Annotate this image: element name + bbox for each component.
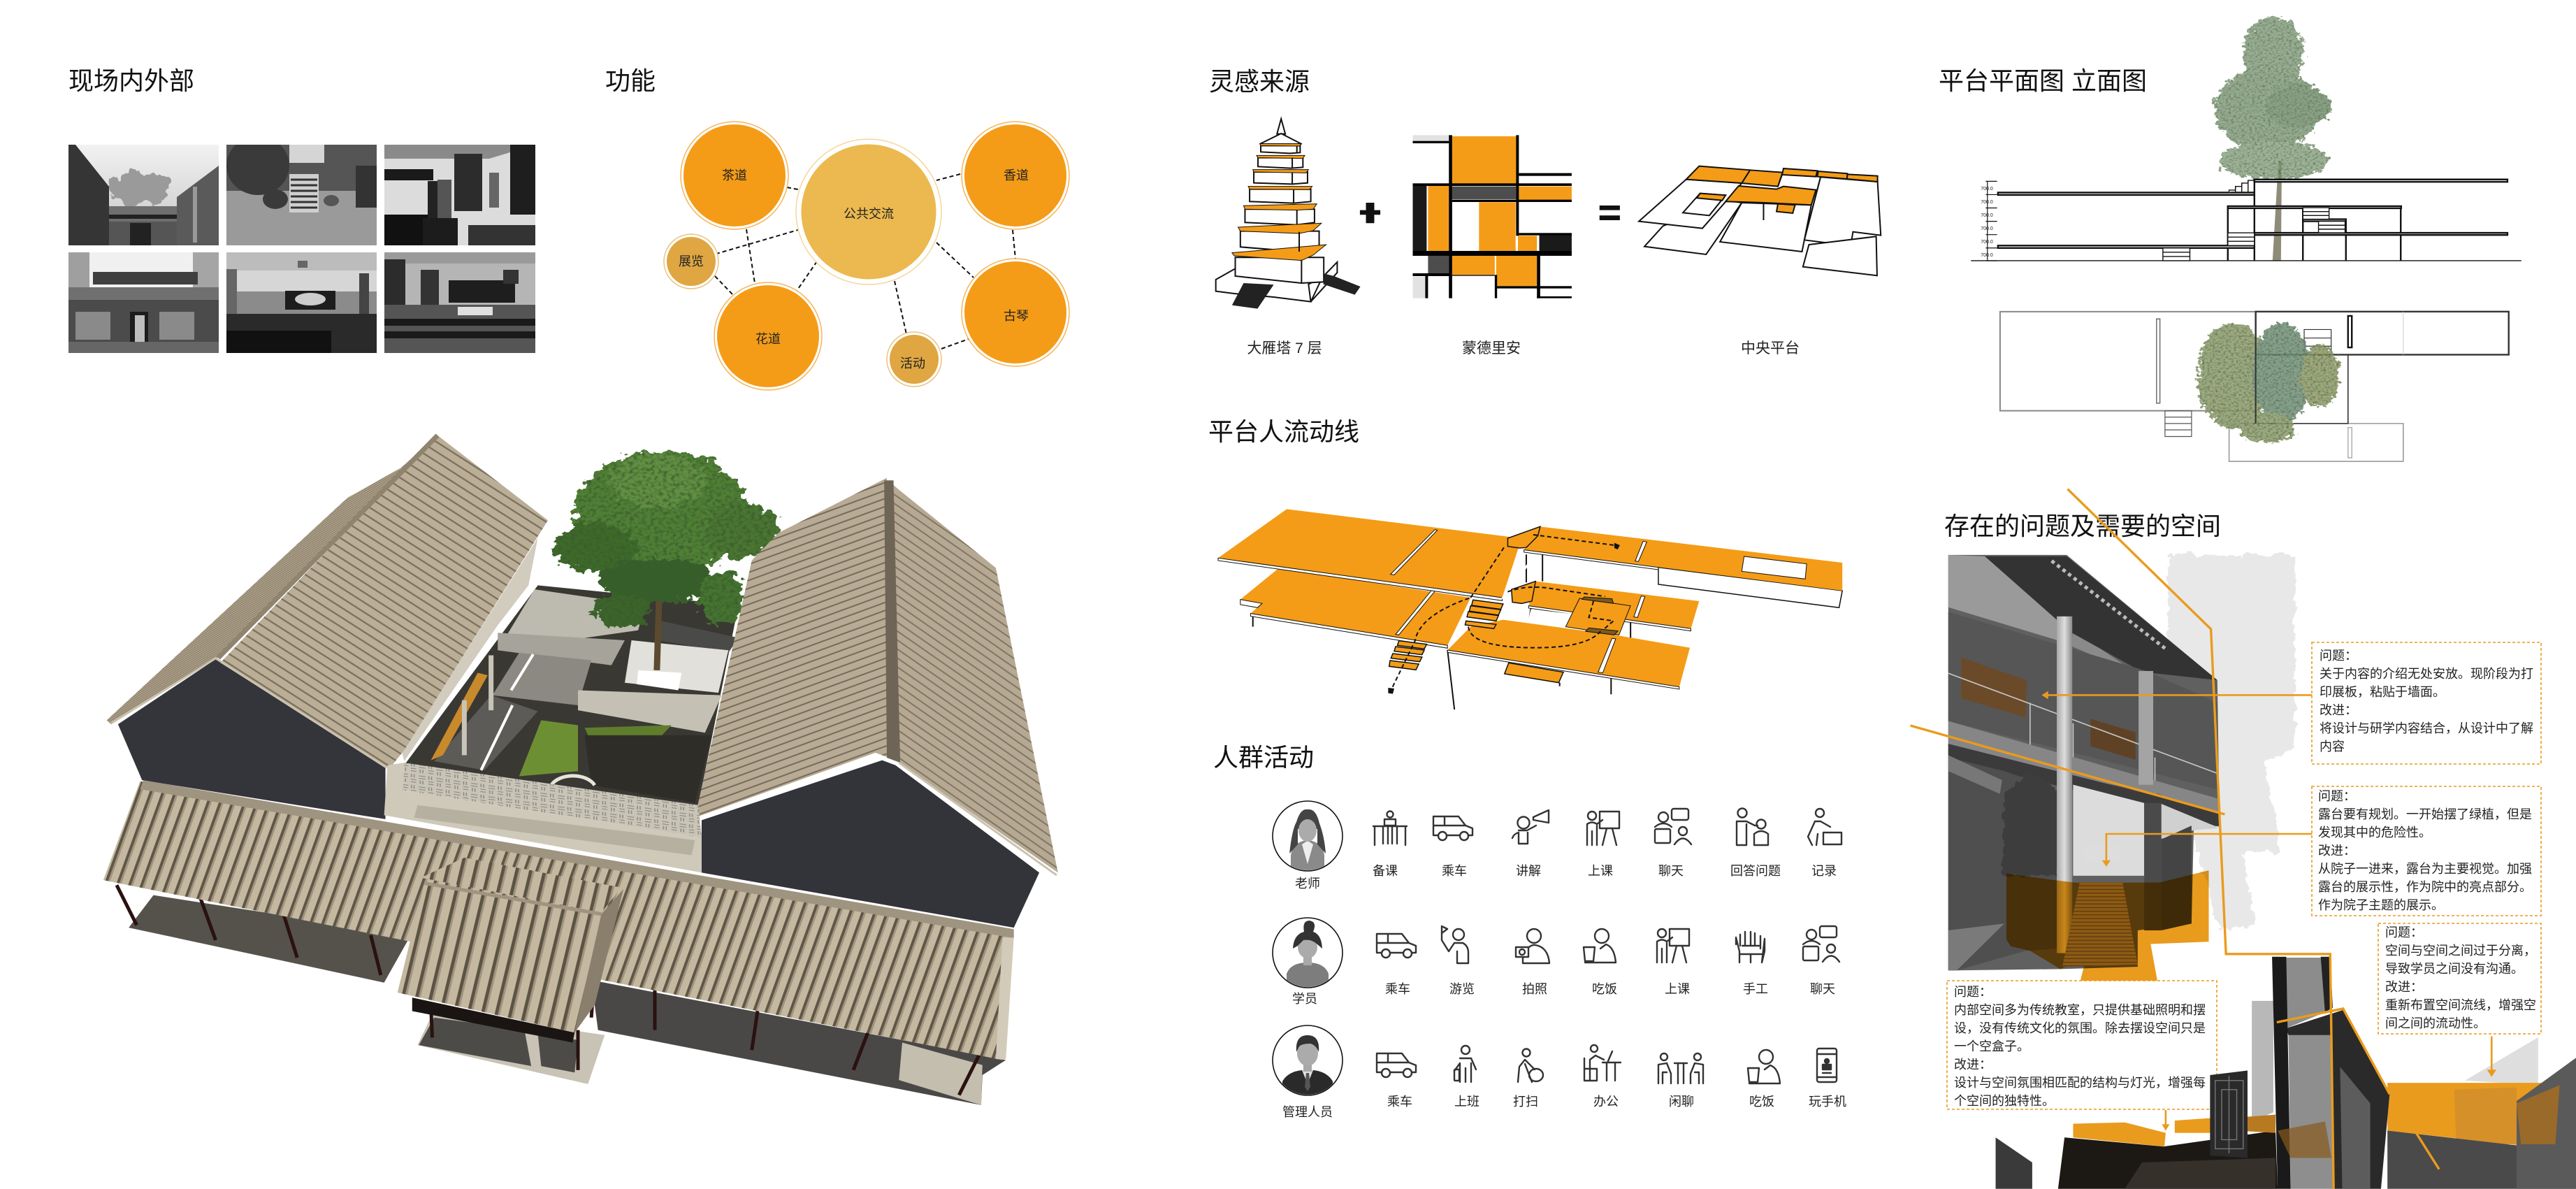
activity labels: 手工 (1743, 982, 1768, 996)
callout: classroom atmosphere issue: 内部空间多为传统教室，只提供基础照明和摆 (1954, 1003, 2206, 1017)
bubble: public exchange (796, 139, 941, 284)
courtyard with platforms (404, 585, 739, 805)
elevation dimensions: 700.0 (1981, 240, 1993, 245)
activity labels: 备课 (1373, 864, 1398, 878)
activity labels: 乘车 (1442, 864, 1467, 878)
callout: terrace issue: 改进： (2318, 844, 2356, 858)
callout: separated spaces issue: 间之间的流动性。 (2385, 1016, 2486, 1030)
dashed circulation path (1389, 535, 1614, 693)
activity labels: 吃饭 (1749, 1095, 1774, 1109)
callout: classroom atmosphere issue: 问题： (1954, 985, 1992, 999)
callout: separated spaces issue: 重新布置空间流线，增强空 (2385, 998, 2536, 1012)
small lower plate (1505, 663, 1563, 683)
tree trunk (657, 585, 660, 670)
callout: display issue: 关于内容的介绍无处安放。现阶段为打 (2320, 667, 2533, 681)
activity labels: 游览 (1449, 982, 1475, 996)
icon row: teacher (1373, 808, 1841, 845)
avatar labels (1282, 877, 1333, 1119)
plus sign (1360, 203, 1380, 223)
lower-right plate (1527, 582, 1699, 631)
equals sign (1600, 206, 1620, 220)
orange highlight over stair (2006, 870, 2209, 984)
upper-right plate (1524, 526, 1842, 591)
stairs (1389, 526, 1540, 670)
upper-left plate (1218, 509, 1535, 600)
elevation dimensions: 700.0 (1981, 253, 1993, 258)
arrow and start marker (1388, 543, 1620, 694)
plan lines (2000, 312, 2509, 461)
activity labels: 上课 (1665, 982, 1690, 996)
activity labels: 乘车 (1385, 982, 1410, 996)
title: inspiration: 灵感来源 (1209, 67, 1310, 96)
stair hall photo (1948, 555, 2220, 970)
orange construction lines (1911, 489, 2439, 1189)
orange table highlights (2073, 1118, 2213, 1146)
lower-left plate (1240, 568, 1470, 648)
photo: classroom wall with sign (384, 145, 535, 245)
callout: classroom atmosphere issue: 一个空盒子。 (1954, 1039, 2029, 1053)
elevation dimensions: 700.0 (1981, 213, 1993, 218)
activity labels: 聊天 (1658, 864, 1684, 878)
bubble: exhibition (664, 234, 718, 289)
central stair (2062, 883, 2138, 967)
activity labels: 玩手机 (1809, 1095, 1846, 1109)
right building gable and roof (695, 478, 1058, 928)
bubble: incense: 香道 (1004, 168, 1029, 182)
callout: display issue (2312, 642, 2541, 764)
callout: classroom atmosphere issue: 个空间的独特性。 (1954, 1094, 2055, 1108)
elevation tree (2214, 17, 2331, 261)
columns (117, 885, 979, 1095)
callout: display issue: 印展板，粘贴于墙面。 (2320, 685, 2445, 699)
function bubble diagram (664, 122, 1069, 390)
bubble: tea (681, 122, 788, 229)
bubble: activity (887, 332, 941, 387)
bubble: exhibition: 展览 (679, 254, 704, 268)
callout: separated spaces issue: 导致学员之间没有沟通。 (2385, 962, 2524, 976)
callout: classroom atmosphere issue: 设，没有传统文化的氛围。除去摆设空间只是 (1954, 1021, 2206, 1035)
activity matrix (1273, 801, 1846, 1119)
pagoda icon (1216, 119, 1361, 309)
central platform sketch (1639, 166, 1881, 275)
callout: terrace issue (2312, 786, 2541, 916)
avatar labels: 老师 (1295, 877, 1320, 891)
activity labels (1373, 864, 1846, 1109)
bubble: public exchange: 公共交流 (844, 207, 894, 221)
photo: classroom with tables (384, 252, 535, 353)
bubble: incense (962, 122, 1069, 229)
inspiration diagram (1216, 119, 1881, 309)
title: functions: 功能 (605, 66, 656, 95)
avatar labels: 管理人员 (1282, 1105, 1333, 1119)
platform circulation axonometric (1218, 509, 1842, 709)
lower white volume (1658, 568, 1842, 607)
activity labels: 讲解 (1516, 864, 1541, 878)
title: problems and needed spaces: 存在的问题及需要的空间 (1944, 512, 2221, 540)
callout: terrace issue: 发现其中的危险性。 (2318, 826, 2431, 839)
arrow heads (2041, 691, 2496, 1130)
activity labels: 上课 (1588, 864, 1613, 878)
lattice screen (2210, 1071, 2248, 1158)
title: site photos: 现场内外部 (68, 66, 194, 95)
long front corrugated roof (103, 780, 1014, 1060)
callout: terrace issue: 露台的展示性，作为院中的亮点部分。 (2318, 880, 2532, 894)
callout: display issue: 将设计与研学内容结合，从设计中了解 (2320, 721, 2533, 735)
elevation dimensions: 700.0 (1981, 226, 1993, 231)
support columns (1253, 554, 1630, 709)
callout: separated spaces issue: 空间与空间之间过于分离， (2385, 944, 2536, 958)
callout: display issue: 问题： (2320, 649, 2357, 663)
avatar: staff (1273, 1025, 1343, 1095)
callout: display issue: 内容 (2320, 740, 2345, 754)
callout: terrace issue: 从院子一进来，露台为主要视觉。加强 (2318, 862, 2532, 876)
avatar labels: 学员 (1292, 992, 1317, 1006)
activity labels: 上班 (1454, 1095, 1479, 1109)
activity labels: 回答问题 (1730, 864, 1781, 878)
activity labels: 聊天 (1810, 982, 1835, 996)
photo: stairs in courtyard (226, 145, 377, 245)
problem collage (1948, 555, 2576, 1189)
activity labels: 吃饭 (1592, 982, 1617, 996)
elevation dimensions (1981, 187, 1993, 258)
photo: classroom with blackboard (226, 252, 377, 353)
bottom photos (1996, 957, 2576, 1189)
hatch landings (1582, 597, 1618, 635)
callout: classroom atmosphere issue: 改进： (1954, 1058, 1992, 1072)
tree canopy (553, 450, 779, 627)
activity labels: 闲聊 (1669, 1095, 1694, 1109)
elevation section lines (1971, 180, 2521, 261)
ground shadows (129, 895, 1006, 1105)
title: circulation: 平台人流动线 (1208, 417, 1359, 446)
callout: display issue: 改进： (2320, 703, 2357, 717)
bubble: guqin (962, 259, 1069, 366)
callout arrows (2045, 695, 2491, 1127)
callout: classroom atmosphere issue: 设计与空间氛围相匹配的结构与灯光，增强每 (1954, 1076, 2206, 1090)
title: plan and elevation: 平台平面图 立面图 (1939, 66, 2147, 95)
caption: Mondrian: 蒙德里安 (1462, 340, 1521, 356)
bubble: guqin: 古琴 (1004, 309, 1029, 323)
title: crowd activities: 人群活动 (1213, 743, 1314, 772)
courtyard perforated wall and ledge (384, 763, 702, 872)
aerial render of courtyard building (103, 435, 1058, 1105)
photo: courtyard with trees (68, 145, 219, 245)
bubble: activity: 活动 (900, 356, 925, 370)
avatar: teacher (1273, 801, 1343, 871)
lattice screen and outlines (1911, 489, 2496, 1189)
caption: pagoda: 大雁塔 7 层 (1247, 340, 1322, 356)
plan tree (2197, 323, 2339, 442)
callout: terrace issue: 作为院子主题的展示。 (2318, 898, 2444, 912)
elevation dimensions: 700.0 (1981, 187, 1993, 192)
Mondrian composition (1412, 135, 1572, 298)
bubble: flower (714, 282, 822, 390)
middle plate (1447, 598, 1690, 689)
callout: separated spaces issue: 问题： (2385, 925, 2423, 939)
callout: separated spaces issue: 改进： (2385, 980, 2423, 994)
connecting dashed lines (715, 174, 1015, 349)
activity labels: 打扫 (1513, 1095, 1538, 1109)
icon row: student (1377, 926, 1839, 963)
callout: separated spaces issue (2378, 923, 2541, 1034)
activity labels: 拍照 (1522, 982, 1547, 996)
entrance portico roof (398, 858, 623, 1042)
elevation dimensions: 700.0 (1981, 200, 1993, 205)
callout: terrace issue: 问题： (2318, 789, 2356, 803)
bubble: tea: 茶道 (722, 168, 747, 182)
avatar: student (1273, 918, 1343, 988)
faded tree and building (2168, 555, 2295, 930)
activity labels: 记录 (1811, 864, 1837, 878)
callout: terrace issue: 露台要有规划。一开始摆了绿植，但是 (2318, 807, 2532, 821)
left building gable and roof (107, 435, 548, 819)
bubble: flower: 花道 (755, 332, 781, 346)
icon row: staff (1377, 1045, 1837, 1083)
photo: traditional gate (68, 252, 219, 353)
activity labels: 办公 (1593, 1095, 1619, 1109)
callout: classroom atmosphere issue (1947, 981, 2217, 1109)
elevation and plan drawings (1971, 17, 2521, 461)
activity labels: 乘车 (1387, 1095, 1412, 1109)
caption: central platform: 中央平台 (1741, 340, 1800, 356)
photo grid: site interior and exterior (68, 136, 535, 353)
